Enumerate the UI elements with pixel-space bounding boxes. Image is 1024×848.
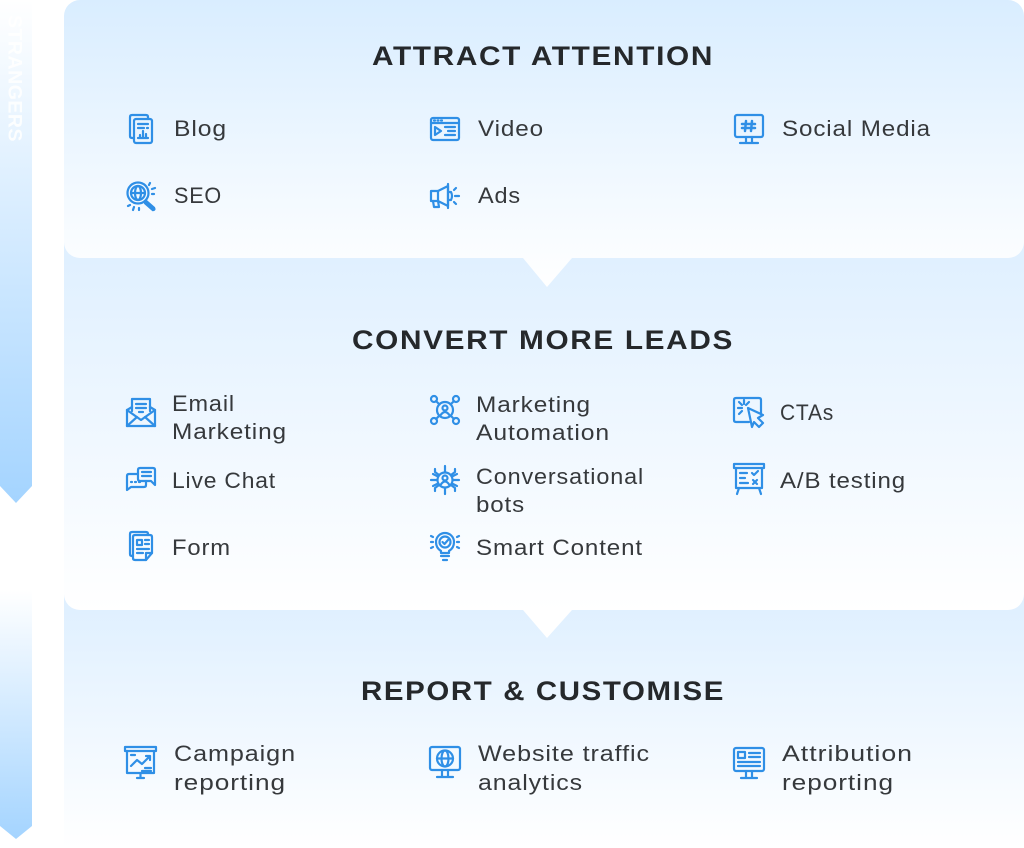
text: email marketing: Email xyxy=(172,391,235,416)
heading: report and customise: REPORT & CUSTOMISE xyxy=(361,676,725,706)
icon: form pages xyxy=(130,532,152,560)
heading: attract attention: ATTRACT ATTENTION xyxy=(372,41,714,71)
icon: megaphone xyxy=(431,184,459,208)
item: form xyxy=(130,532,231,560)
text: campaign reporting: reporting xyxy=(174,770,286,795)
text: attribution reporting: Attribution xyxy=(782,741,913,766)
icon: test board xyxy=(734,464,764,494)
text: smart content: Smart Content xyxy=(476,535,643,560)
text: live chat: Live Chat xyxy=(172,468,276,493)
arrow: second stage xyxy=(0,590,32,839)
text: email marketing: Marketing xyxy=(172,419,287,444)
text: ctas: CTAs xyxy=(780,400,834,425)
item: conversational bots xyxy=(431,464,644,517)
item: social media xyxy=(735,115,931,143)
text: conversational bots: bots xyxy=(476,492,525,517)
text: website traffic analytics: analytics xyxy=(478,770,583,795)
icon: globe monitor xyxy=(430,747,460,777)
text: marketing automation: Automation xyxy=(476,420,610,445)
item: ctas xyxy=(734,398,834,427)
panel: convert more leads xyxy=(64,240,1024,638)
icon: light bulb xyxy=(431,533,459,560)
item: a/b testing xyxy=(734,464,906,494)
text: a/b testing: A/B testing xyxy=(780,468,906,493)
icon: envelope xyxy=(127,399,155,426)
item: marketing automation xyxy=(431,392,610,445)
icon: hashtag monitor xyxy=(735,115,763,143)
item: ads xyxy=(431,183,521,208)
text: social media: Social Media xyxy=(782,116,931,141)
icon: cursor click xyxy=(734,398,763,427)
icon: blog pages xyxy=(130,115,152,143)
icon: report monitor xyxy=(734,748,764,778)
text: video: Video xyxy=(478,116,544,141)
item: seo xyxy=(128,182,222,210)
text: blog: Blog xyxy=(174,116,227,141)
panel: report and customise xyxy=(64,590,1024,848)
icon: video window xyxy=(431,118,459,140)
icon: bot head xyxy=(431,466,459,494)
text: seo: SEO xyxy=(174,183,222,208)
item: live chat xyxy=(127,468,276,493)
item: website traffic analytics xyxy=(430,741,650,795)
text: ads: Ads xyxy=(478,183,521,208)
text: attribution reporting: reporting xyxy=(782,770,894,795)
item: attribution reporting xyxy=(734,741,913,795)
text: website traffic analytics: Website traffic xyxy=(478,741,650,766)
item: campaign reporting xyxy=(125,741,296,795)
text: conversational bots: Conversational xyxy=(476,464,644,489)
label: strangers: STRANGERS xyxy=(4,15,24,142)
item: video xyxy=(431,116,544,141)
item: blog xyxy=(130,115,227,143)
icon: network person xyxy=(431,396,459,424)
text: campaign reporting: Campaign xyxy=(174,741,296,766)
icon: chat bubbles xyxy=(127,468,155,490)
item: smart content xyxy=(431,533,643,560)
panel: attract attention xyxy=(64,0,1024,287)
arrow: strangers stage xyxy=(0,0,32,503)
icon: globe magnifier xyxy=(128,182,155,210)
text: marketing automation: Marketing xyxy=(476,392,591,417)
heading: convert more leads: CONVERT MORE LEADS xyxy=(352,325,734,355)
text: form: Form xyxy=(172,535,231,560)
icon: presentation chart xyxy=(125,747,156,778)
item: email marketing xyxy=(127,391,287,444)
